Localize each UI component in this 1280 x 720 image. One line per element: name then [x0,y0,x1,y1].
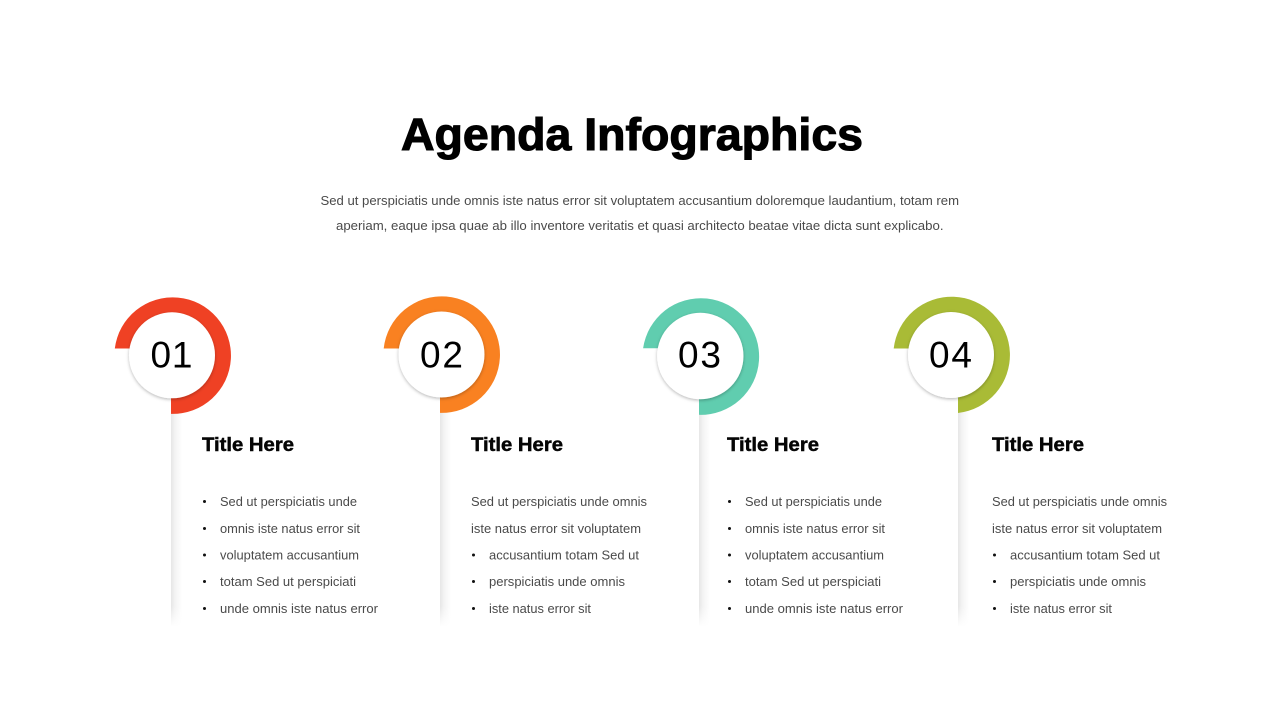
bullet list: item 03: Sed ut perspiciatis unde [745,494,882,509]
intro text: Sed ut perspiciatis unde omnis iste natus error sit voluptatem accusantium doloremque laudantium, totam rem [320,193,959,208]
bullet list: item 03: totam Sed ut perspiciati [745,574,881,589]
title: Agenda Infographics [401,109,863,160]
intro text [320,193,959,233]
number badge 02 [398,312,484,398]
ring: teal [643,298,759,415]
bullet list: item 01: voluptatem accusantium [220,548,359,562]
panel: agenda item 02 [384,296,647,627]
number badge 04 [908,312,994,398]
heading: item 04: Title Here [992,435,1084,456]
heading: item 02: Title Here [471,435,563,456]
bullet list: item 01: Sed ut perspiciatis unde [220,494,357,509]
text and bullet list: item 02: Sed ut perspiciatis unde omnis [471,494,647,509]
number badge 02: 02 [420,334,463,376]
ring: orange [384,296,500,413]
bullet list: item 03 [728,494,904,616]
heading: item 01: Title Here [202,435,294,456]
text and bullet list: item 04 [992,494,1167,616]
text and bullet list: item 04: iste natus error sit [1010,601,1112,616]
bullet list: item 01: totam Sed ut perspiciati [220,574,356,589]
panel: agenda item 01 [115,297,379,627]
intro text: aperiam, eaque ipsa quae ab illo inventore veritatis et quasi architecto beatae vitae dicta sunt explicabo. [336,218,944,233]
bullet list: item 01 [203,494,379,616]
ring: olive [894,297,1010,413]
bullet list: item 03: unde omnis iste natus error [745,601,904,616]
text and bullet list: item 04: perspiciatis unde omnis [1010,574,1146,589]
number badge 04: 04 [929,334,972,376]
text and bullet list: item 04: accusantium totam Sed ut [1010,548,1160,562]
text and bullet list: item 02: accusantium totam Sed ut [489,548,639,562]
panel: agenda item 04 [894,297,1167,627]
bullet list: item 03: omnis iste natus error sit [745,521,885,536]
bullet list: item 01: unde omnis iste natus error [220,601,379,616]
text and bullet list: item 02: perspiciatis unde omnis [489,574,625,589]
text and bullet list: item 04: iste natus error sit voluptatem [992,521,1162,536]
number badge 01: 01 [150,334,192,376]
text and bullet list: item 04: Sed ut perspiciatis unde omnis [992,494,1167,509]
text and bullet list: item 02: iste natus error sit voluptatem [471,521,641,536]
bullet list: item 01: omnis iste natus error sit [220,521,360,536]
bullet list: item 03: voluptatem accusantium [745,548,884,562]
panel: agenda item 03 [643,298,904,627]
ring: red [115,297,231,414]
number badge 03 [657,313,744,399]
number badge 03: 03 [678,334,721,376]
heading: item 03: Title Here [727,435,819,456]
text and bullet list: item 02 [471,494,647,616]
text and bullet list: item 02: iste natus error sit [489,601,591,616]
number badge 01 [129,312,215,398]
